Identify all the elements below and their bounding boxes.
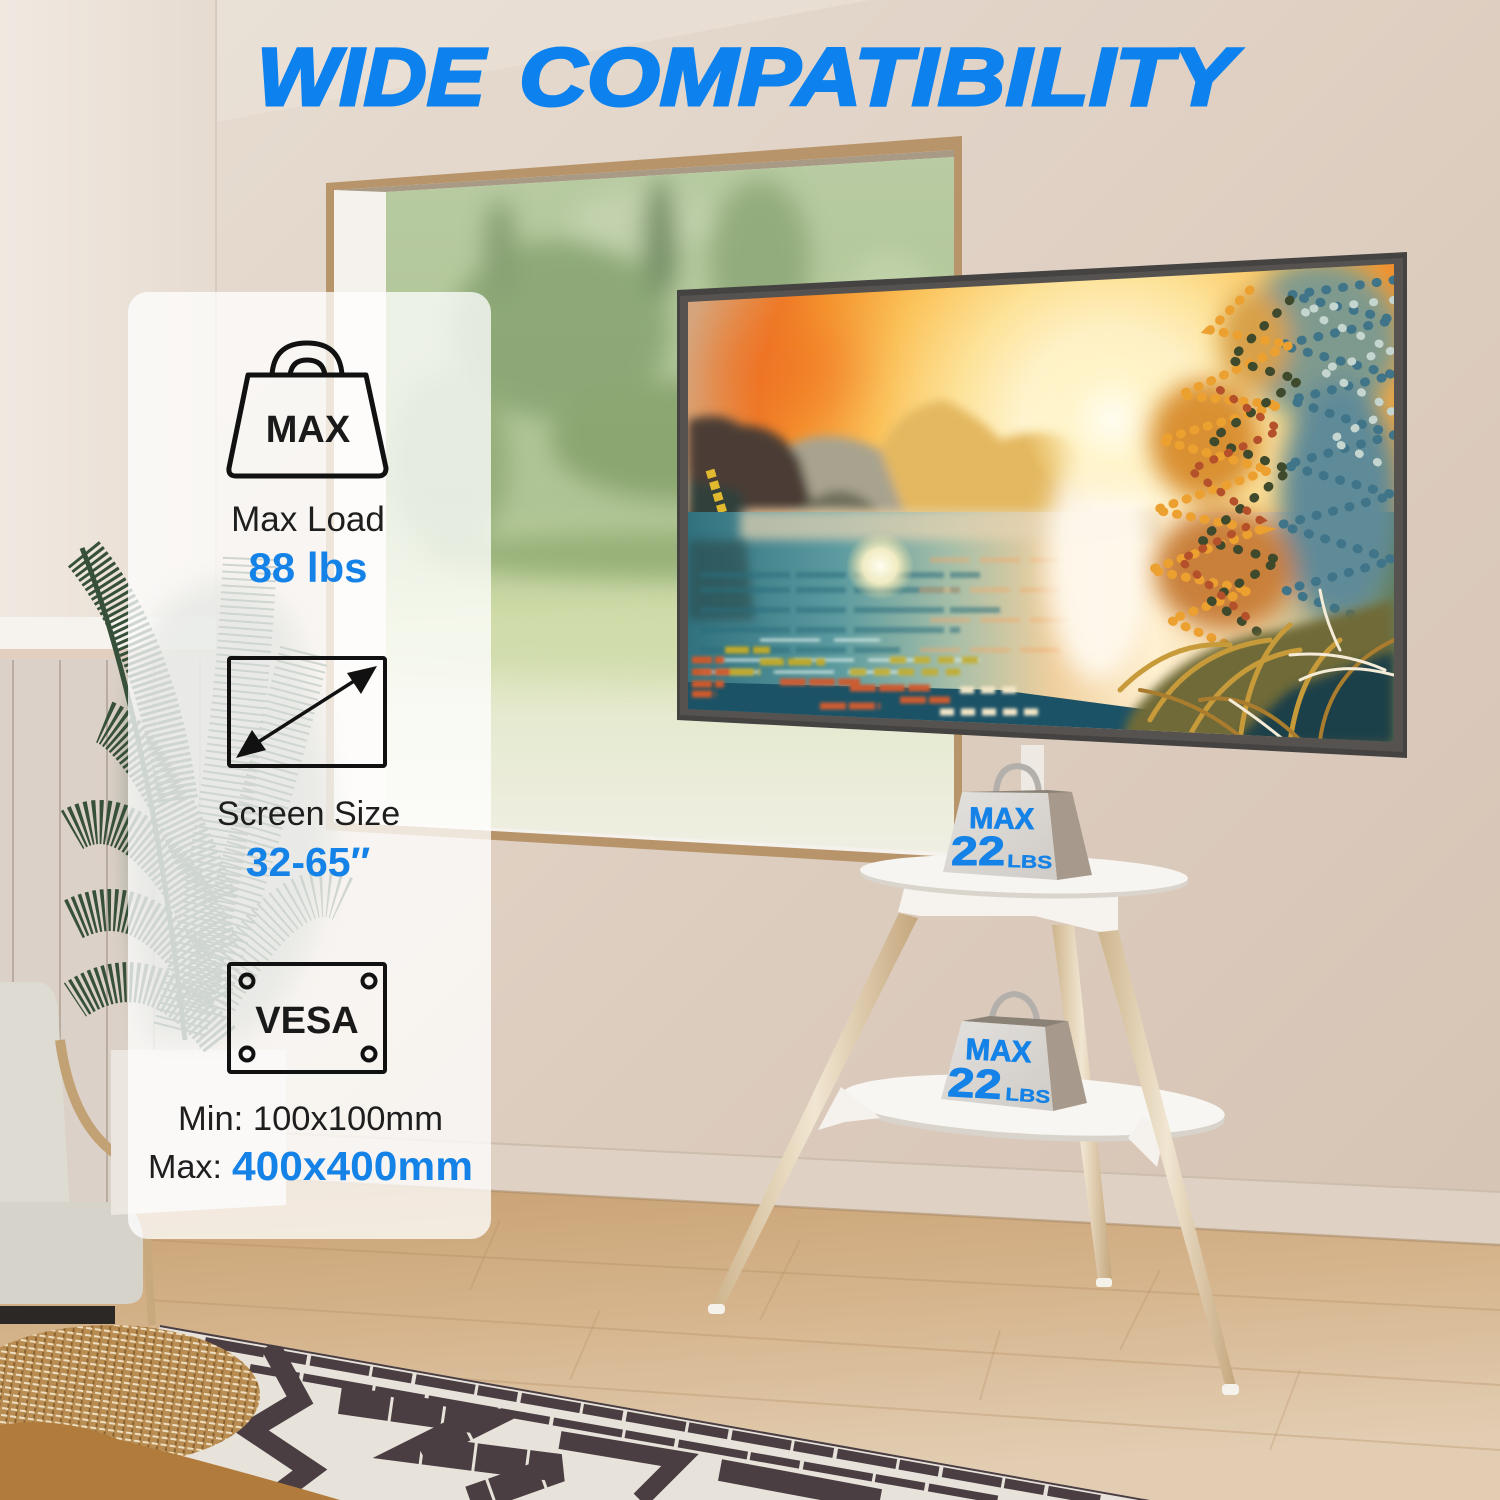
- top weight: LBS: [1007, 851, 1053, 873]
- baseboard: [216, 1130, 1500, 1245]
- icon: screen size: [229, 658, 385, 766]
- text: max load: [231, 500, 385, 591]
- left leg: [712, 913, 918, 1310]
- water: [680, 512, 1400, 752]
- top weight: MAX: [969, 802, 1034, 836]
- leather sofa corner: [0, 1422, 340, 1500]
- text: screen size: Screen Size: [217, 795, 400, 833]
- rug: [100, 1325, 1150, 1500]
- stand pole: [1021, 745, 1044, 865]
- rear leg: [1052, 925, 1112, 1280]
- title: COMPATIBILITY: [519, 32, 1242, 123]
- stand: [708, 851, 1239, 1395]
- text: screen size: 32-65″: [246, 839, 370, 885]
- top bracket: [898, 885, 1118, 932]
- lower weight: 22: [947, 1059, 1003, 1108]
- icon: vesa: [229, 964, 385, 1072]
- sun: [1046, 440, 1150, 680]
- top weight: 22: [951, 828, 1005, 874]
- lower weight: LBS: [1005, 1084, 1051, 1107]
- text: vesa sizes: 400x400mm: [232, 1143, 473, 1189]
- lily pads: [692, 650, 1040, 712]
- icon: vesa: VESA: [255, 1000, 359, 1042]
- chair: [0, 982, 152, 1325]
- ceiling: [216, 0, 870, 122]
- plant pot: [111, 1050, 286, 1215]
- floor: [0, 1176, 1500, 1500]
- ottoman: [0, 1325, 260, 1465]
- reeds: [1120, 600, 1394, 745]
- lower shelf brackets: [818, 1087, 1165, 1167]
- plant: [72, 548, 345, 1040]
- window: [326, 136, 980, 868]
- tv: [677, 252, 1407, 758]
- foliage texture: [1150, 280, 1394, 650]
- title: WIDE: [257, 32, 487, 123]
- text: vesa sizes: Min: 100x100mm: [178, 1100, 443, 1138]
- painting: [680, 255, 1400, 752]
- left wall: [0, 0, 216, 1230]
- top shelf: [860, 854, 1188, 902]
- text: screen size: [217, 795, 400, 885]
- text: max load: 88 lbs: [248, 544, 368, 591]
- icon: max load weight: [229, 343, 386, 476]
- lower weight: MAX: [965, 1033, 1032, 1069]
- lower shelf: [840, 1066, 1226, 1150]
- text: vesa sizes: Max:: [148, 1148, 222, 1185]
- right leg: [1098, 925, 1236, 1388]
- far trees: [688, 396, 1082, 512]
- text: max load: Max Load: [231, 500, 385, 539]
- icon: max load weight: MAX: [266, 409, 351, 451]
- top weight: [943, 766, 1092, 880]
- lower weight: [941, 994, 1087, 1111]
- right foliage base: [1150, 260, 1400, 630]
- title: [257, 32, 1242, 123]
- panel: specifications: [128, 292, 491, 1239]
- wainscot: [0, 617, 216, 1219]
- text: vesa sizes: [148, 1100, 473, 1189]
